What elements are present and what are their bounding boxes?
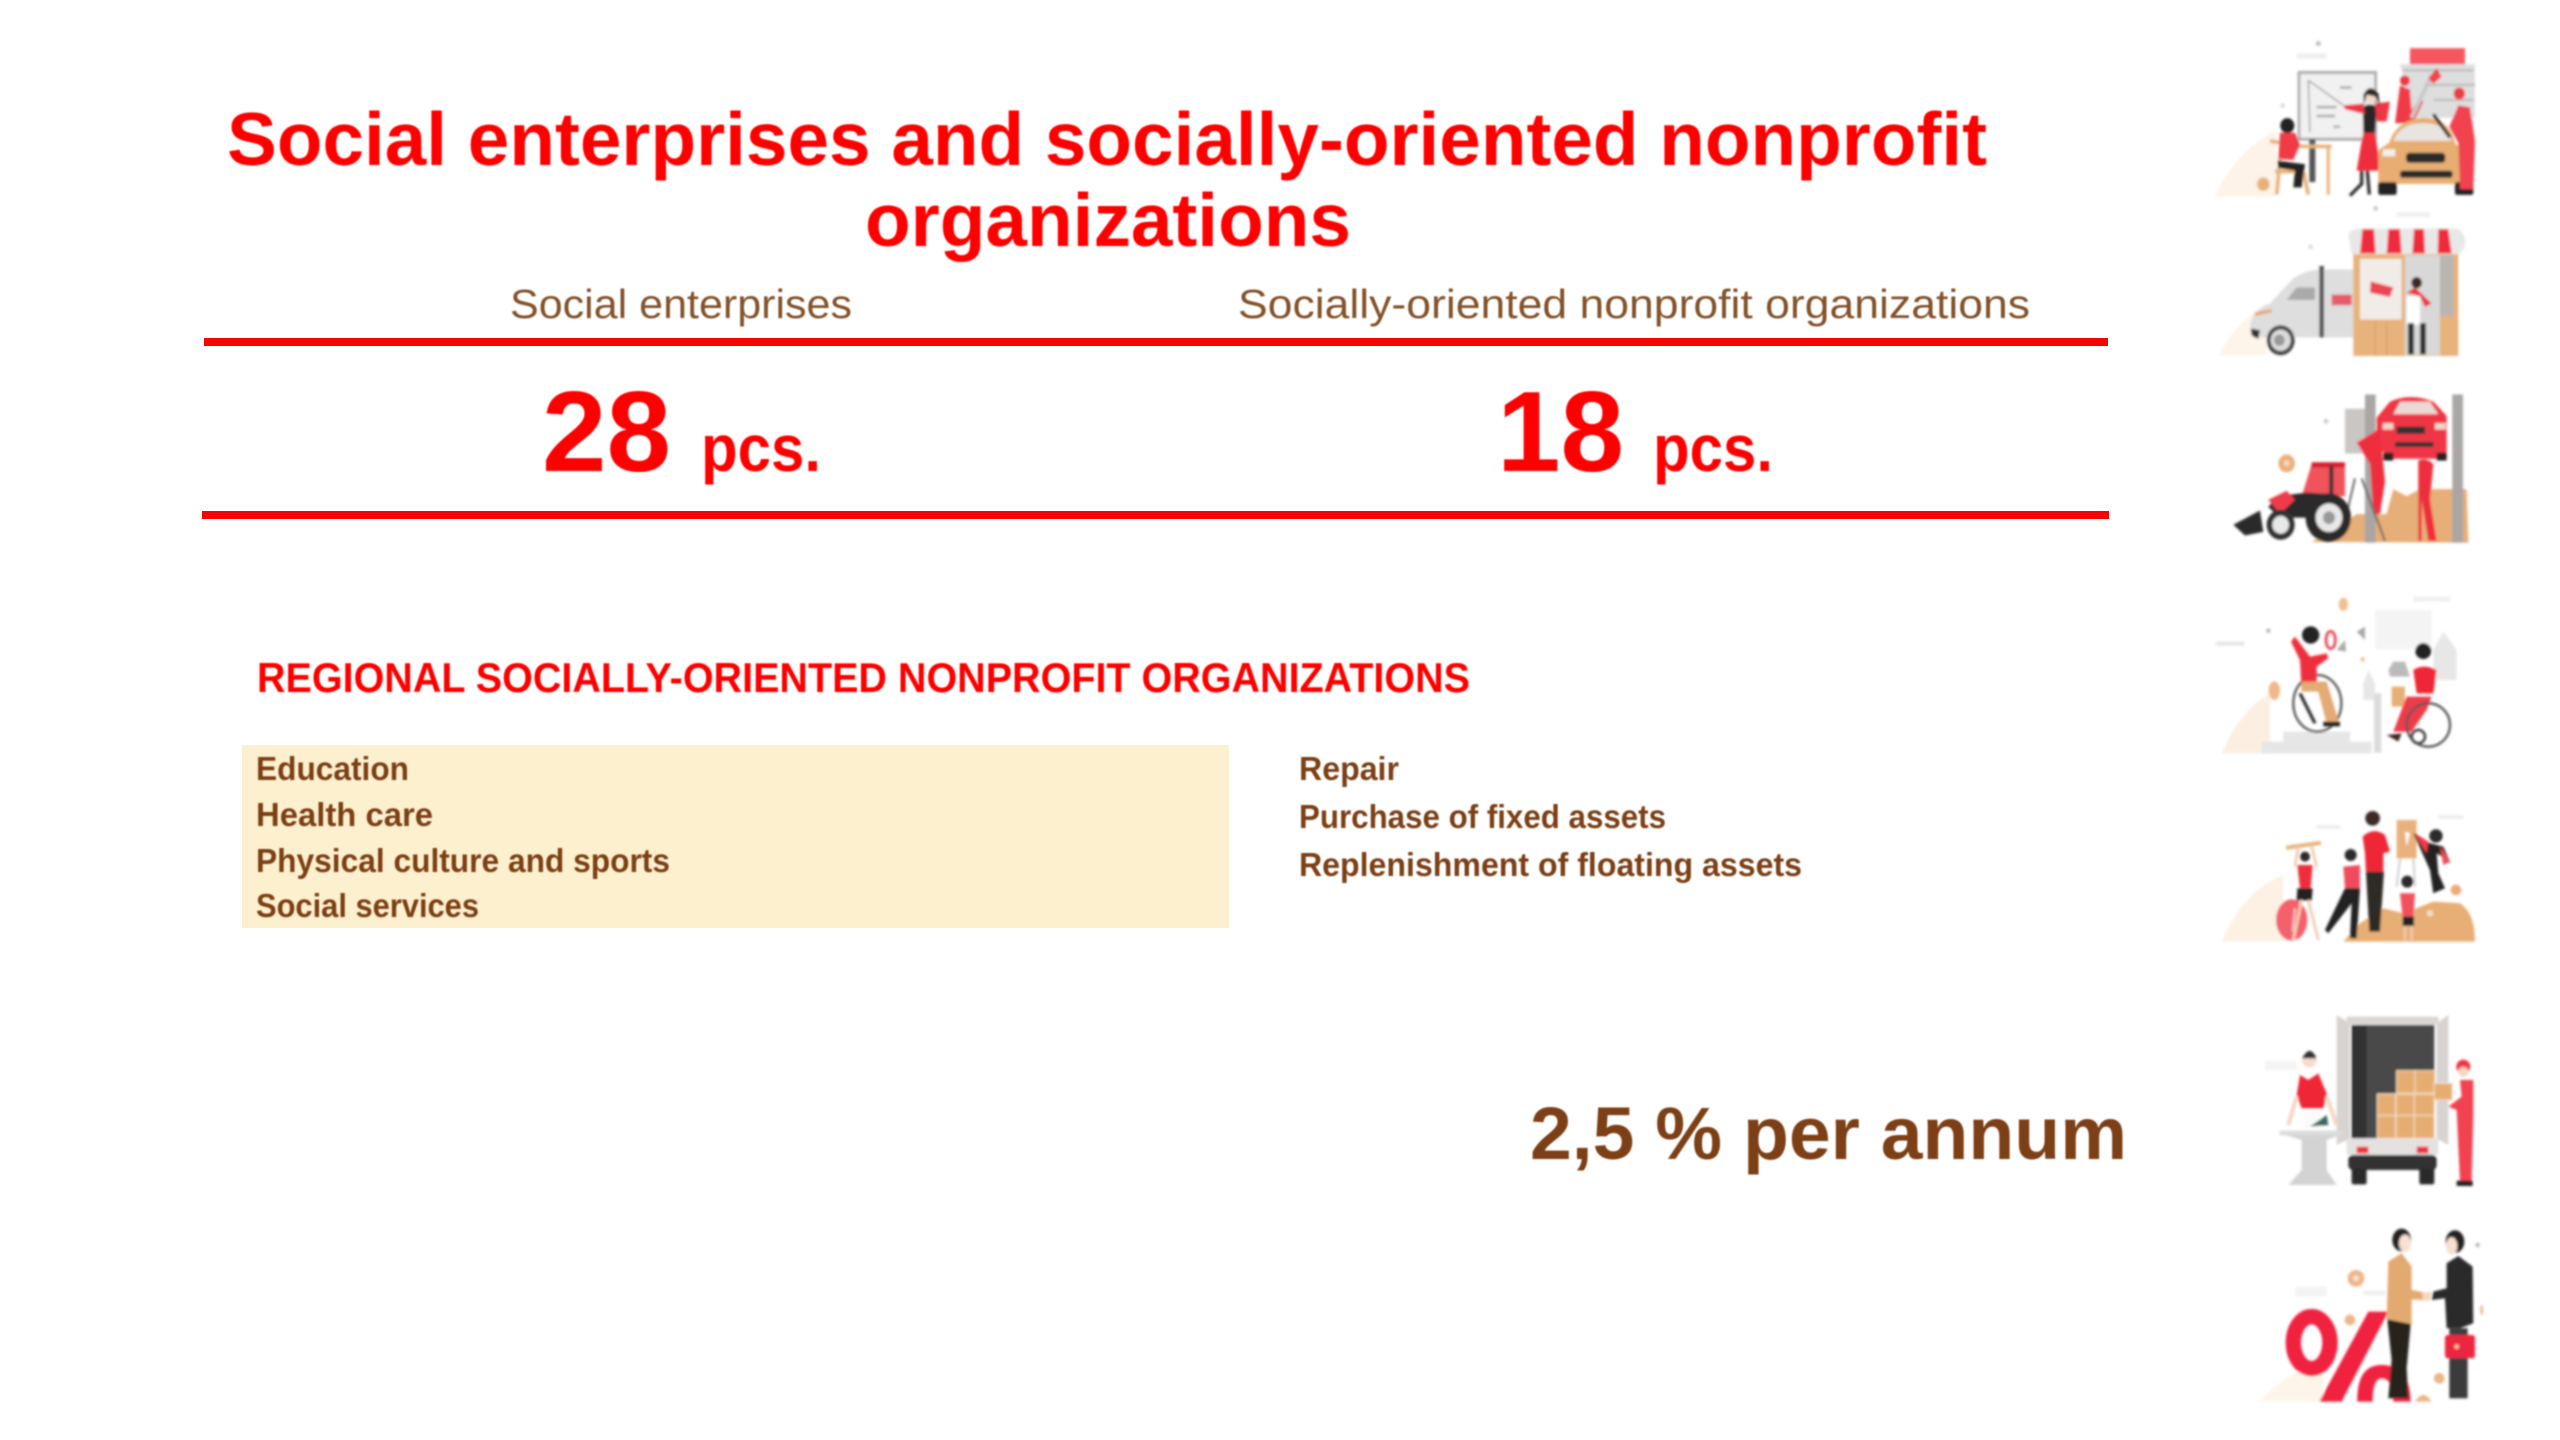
list: purposes: Purchase of fixed assets <box>1299 798 1666 835</box>
list: purposes: Replenishment of floating assets <box>1299 846 1802 883</box>
highlighted list panel: Social services <box>256 887 479 924</box>
stat: 18 pcs.: 18 <box>1497 369 1624 496</box>
icon: handshake and percent sign <box>2260 1229 2483 1402</box>
stat: 28 pcs.: 28 <box>542 369 671 496</box>
column heading: social enterprises: Social enterprises <box>510 281 852 327</box>
title <box>227 97 1987 262</box>
icon: delivery van and shop <box>2218 206 2465 356</box>
section heading: REGIONAL SOCIALLY-ORIENTED NONPROFIT ORGANIZATIONS <box>257 654 1470 701</box>
stat: 18 pcs.: pcs. <box>1653 411 1773 485</box>
column heading: socially-oriented nonprofit organizations: Socially-oriented nonprofit organizations <box>1238 281 2030 327</box>
stat: 18 pcs. <box>1497 369 1773 496</box>
icon: teacher and car repair <box>2215 41 2475 196</box>
highlighted list panel <box>242 745 1229 928</box>
highlighted list panel: Physical culture and sports <box>256 842 670 879</box>
list: purposes <box>1299 750 1802 883</box>
icon: family with children's activities <box>2222 811 2475 942</box>
list: purposes: Repair <box>1299 750 1399 787</box>
icon: delivery truck loading boxes <box>2265 1015 2473 1186</box>
interest rate: 2,5 % per annum <box>1530 1092 2127 1175</box>
title: organizations <box>865 178 1351 262</box>
icon: people in wheelchairs <box>2216 597 2457 753</box>
stat: 28 pcs. <box>542 369 821 496</box>
highlighted list panel: Education <box>256 750 409 787</box>
icon: tractor and car lift <box>2233 394 2468 543</box>
highlighted list panel: Health care <box>256 796 433 833</box>
stat: 28 pcs.: pcs. <box>701 411 821 485</box>
title: Social enterprises and socially-oriented nonprofit <box>227 97 1987 181</box>
